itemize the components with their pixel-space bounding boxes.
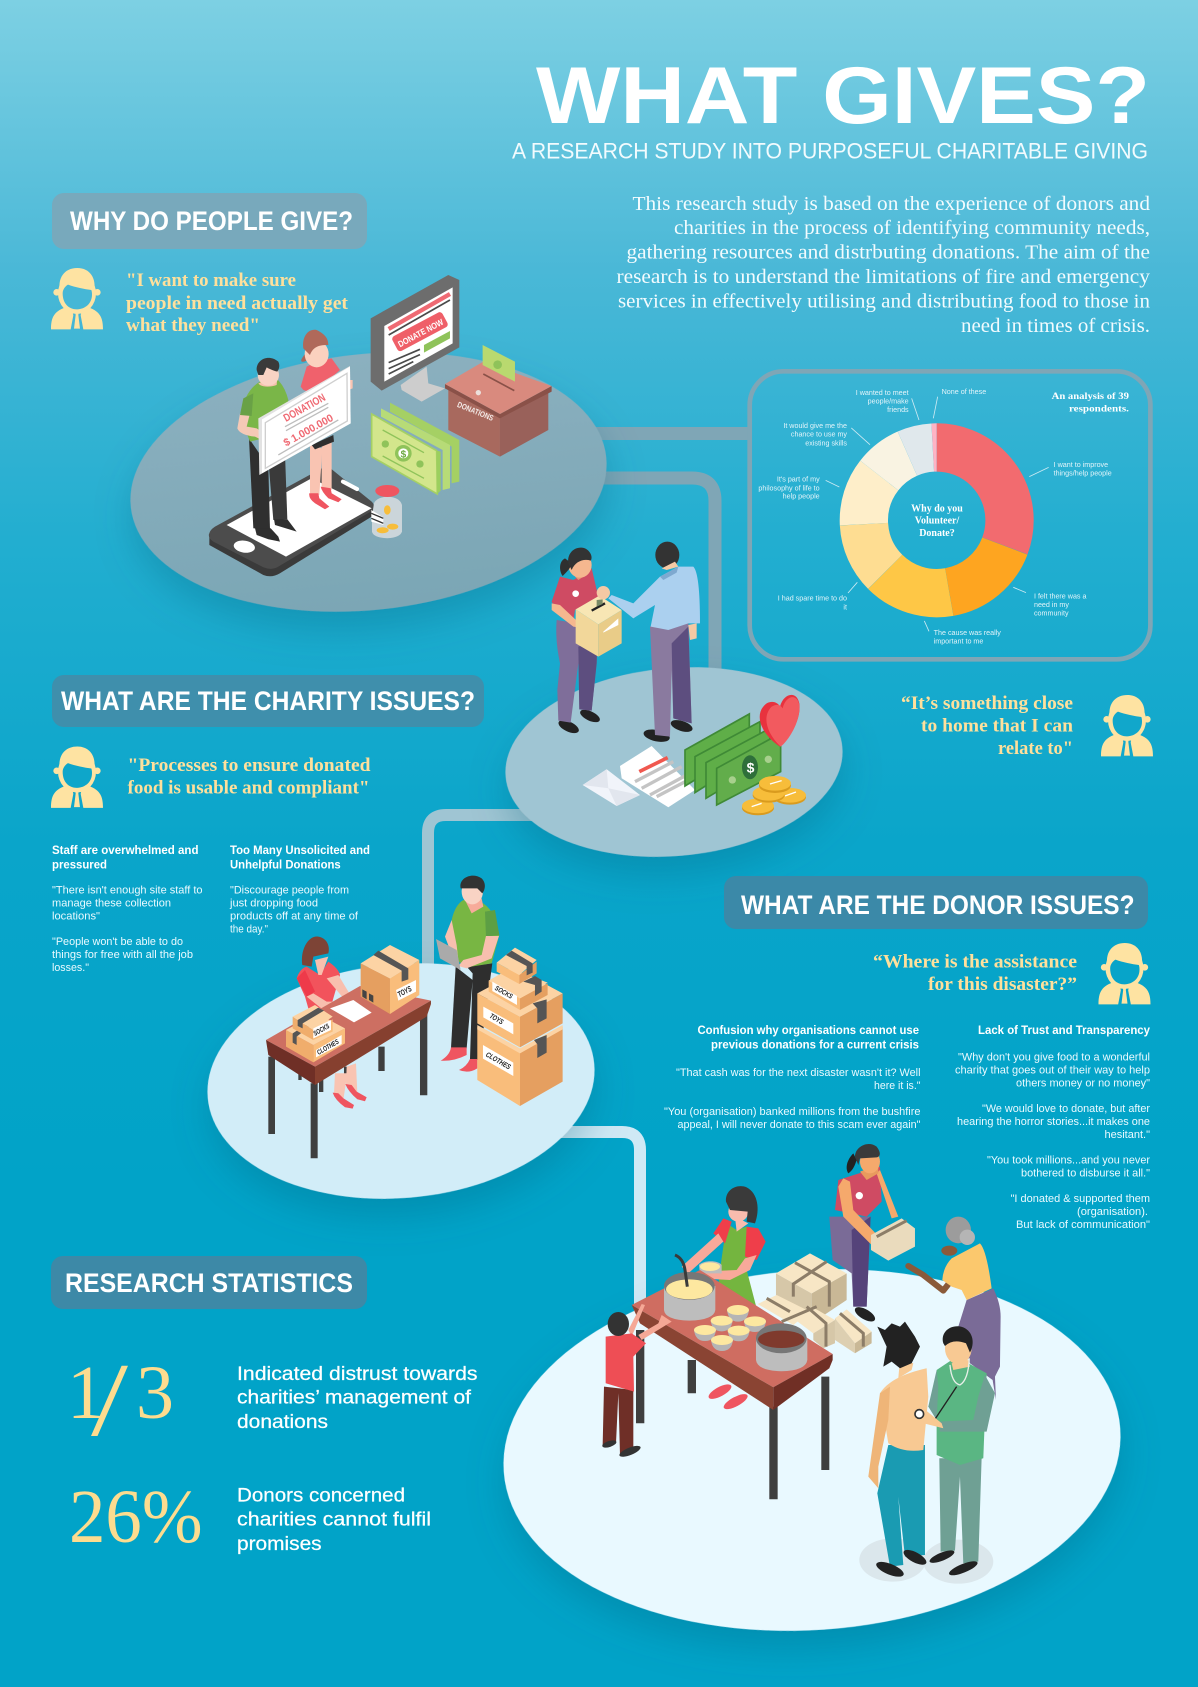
bundle of banknotes bbox=[372, 403, 459, 494]
text block: unsolicited donations: just dropping food bbox=[229, 898, 318, 910]
intro paragraph: services in effectively utilising and distributing food to those in bbox=[618, 292, 1150, 312]
icon: person 3 bbox=[51, 746, 103, 808]
text block: confusion: "That cash was for the next disaster wasn't it? Well bbox=[676, 1067, 920, 1079]
chart labels and leader lines: The cause was really bbox=[934, 629, 1001, 637]
platform: donor scene bbox=[491, 1249, 1133, 1651]
statistic: 26 percent bbox=[69, 1475, 431, 1559]
text block: confusion: Confusion why organisations cannot use bbox=[698, 1023, 919, 1037]
parcels: socks and clothes: CLOTHES bbox=[316, 1039, 341, 1057]
table legs bbox=[268, 1013, 427, 1158]
chart labels and leader lines: community bbox=[1034, 609, 1069, 617]
cardboard boxes bbox=[758, 1253, 872, 1353]
connector: giving to second scene bbox=[590, 478, 715, 690]
statistic: one third: / bbox=[91, 1341, 129, 1458]
text block: unsolicited donations: products off at any time of bbox=[230, 910, 359, 922]
quote: why give: people in need actually get bbox=[126, 294, 349, 314]
heading: research statistics bbox=[51, 1256, 367, 1309]
text block: staff overwhelmed: pressured bbox=[52, 858, 107, 872]
text block: lack of trust: hearing the horror stories...it makes one bbox=[957, 1116, 1150, 1128]
standing man with tablet bbox=[436, 876, 499, 1072]
chart labels and leader lines: respondents. bbox=[1069, 405, 1129, 415]
quote: why give: "I want to make sure bbox=[126, 271, 296, 291]
heart front face bbox=[766, 697, 799, 747]
donation box: DONATIONS bbox=[456, 400, 495, 423]
statistic: 26 percent: promises bbox=[237, 1533, 322, 1555]
soup bowls bbox=[694, 1305, 766, 1351]
large pot bbox=[664, 1255, 715, 1321]
small pot bbox=[756, 1323, 807, 1371]
quote: why give bbox=[126, 271, 349, 336]
gold coins bbox=[742, 776, 806, 815]
statistic: one third: donations bbox=[237, 1411, 328, 1433]
text block: lack of trust: hesitant." bbox=[1104, 1129, 1150, 1141]
patient bbox=[868, 1322, 943, 1580]
doctor bbox=[923, 1326, 995, 1578]
quote: close to home: “It’s something close bbox=[901, 694, 1073, 714]
text block: lack of trust bbox=[955, 1023, 1150, 1231]
text block: confusion: appeal, I will never donate to this scam ever again" bbox=[678, 1119, 921, 1131]
heading: why do people give bbox=[52, 193, 367, 249]
heading: donor issues bbox=[724, 876, 1148, 929]
intro paragraph bbox=[616, 194, 1150, 337]
cheque: DONATION bbox=[282, 392, 328, 425]
intro paragraph: research is to understand the limitations of fire and emergency bbox=[616, 267, 1150, 288]
quote: close to home: relate to" bbox=[998, 739, 1073, 759]
woman in red top bbox=[301, 330, 353, 509]
statistic: one third: 3 bbox=[136, 1351, 174, 1435]
text block: staff overwhelmed: things for free with all the job bbox=[52, 949, 193, 961]
statistic: one third: charities’ management of bbox=[237, 1386, 472, 1408]
text block: confusion: here it is." bbox=[874, 1080, 921, 1092]
icon: person 1 bbox=[51, 268, 103, 329]
chart labels and leader lines: I felt there was a bbox=[1034, 592, 1086, 600]
heading: why do people give: WHY DO PEOPLE GIVE? bbox=[70, 206, 353, 236]
text block: lack of trust: "I donated & supported them bbox=[1010, 1193, 1150, 1205]
man in blue shirt bbox=[597, 542, 700, 744]
text block: unsolicited donations: Unhelpful Donations bbox=[230, 858, 341, 872]
icon: person 2 bbox=[1101, 695, 1153, 756]
box stack: SOCKS bbox=[493, 985, 514, 1001]
shoes under table bbox=[707, 1382, 750, 1412]
illustration: handing over donation bbox=[552, 542, 806, 815]
text block: confusion: previous donations for a current crisis bbox=[711, 1038, 919, 1052]
text block: lack of trust: "We would love to donate, but after bbox=[982, 1103, 1150, 1115]
text block: unsolicited donations bbox=[229, 843, 370, 936]
green banknotes: $ bbox=[747, 760, 755, 776]
parcel: toys: TOYS bbox=[396, 984, 414, 999]
platform: giving scene bbox=[117, 330, 620, 634]
intro paragraph: need in times of crisis. bbox=[961, 316, 1150, 337]
seated woman bbox=[297, 937, 367, 1109]
chart labels and leader lines: philosophy of life to bbox=[758, 484, 820, 492]
statistic: one third: 1 bbox=[67, 1351, 105, 1435]
chart labels and leader lines: people/make bbox=[868, 398, 909, 406]
paper sheet bbox=[330, 1000, 372, 1022]
text block: unsolicited donations: the day." bbox=[230, 924, 268, 936]
text block: lack of trust: (organisation). bbox=[1077, 1206, 1148, 1218]
heading: charity issues: WHAT ARE THE CHARITY ISSUES? bbox=[61, 686, 475, 716]
text block: staff overwhelmed: Staff are overwhelmed and bbox=[52, 843, 198, 857]
heading: donor issues: WHAT ARE THE DONOR ISSUES? bbox=[741, 890, 1134, 920]
quote: processes bbox=[128, 756, 371, 798]
bundle of banknotes: $ bbox=[401, 449, 407, 460]
chart labels and leader lines: It's part of my bbox=[777, 476, 820, 484]
chart labels and leader lines: need in my bbox=[1034, 601, 1069, 609]
chart labels and leader lines: I want to improve bbox=[1054, 461, 1108, 469]
statistic: one third: Indicated distrust towards bbox=[237, 1363, 478, 1385]
text block: staff overwhelmed: manage these collection bbox=[52, 898, 171, 910]
text block: lack of trust: bothered to disburse it all." bbox=[1021, 1168, 1150, 1180]
chart labels and leader lines: existing skills bbox=[805, 439, 847, 447]
desktop monitor: DONATE NOW bbox=[396, 316, 446, 349]
box stack bbox=[477, 948, 563, 1106]
donation box bbox=[445, 345, 552, 457]
chart labels and leader lines: I had spare time to do bbox=[778, 595, 847, 603]
cheque bbox=[258, 366, 351, 475]
chart labels and leader lines: It would give me the bbox=[783, 422, 847, 430]
icon: person 4 bbox=[1098, 943, 1150, 1004]
chart labels and leader lines: Why do you bbox=[911, 503, 963, 514]
chart labels and leader lines: help people bbox=[783, 493, 820, 501]
intro paragraph: gathering resources and distrbuting donations. The aim of the bbox=[626, 242, 1150, 264]
cheque: $ 1.000.000 bbox=[282, 412, 336, 449]
foot shadows bbox=[859, 1538, 993, 1584]
quote: processes: "Processes to ensure donated bbox=[128, 756, 371, 776]
statistic: 26 percent: charities cannot fulfil bbox=[237, 1508, 431, 1530]
text block: staff overwhelmed: locations" bbox=[52, 910, 100, 922]
collection box bbox=[576, 596, 622, 657]
chart labels and leader lines: An analysis of 39 bbox=[1052, 392, 1129, 402]
text block: lack of trust: Lack of Trust and Transparency bbox=[978, 1023, 1150, 1037]
text block: staff overwhelmed: "There isn't enough site staff to bbox=[52, 884, 202, 896]
quote: where is the assistance: for this disaster?” bbox=[928, 975, 1077, 995]
quote: where is the assistance: “Where is the assistance bbox=[873, 952, 1077, 972]
text block: staff overwhelmed: "People won't be able to do bbox=[52, 936, 183, 948]
text block: unsolicited donations: Too Many Unsolicited and bbox=[230, 843, 370, 857]
desktop monitor bbox=[371, 275, 459, 402]
statistic: 26 percent: 26% bbox=[69, 1475, 202, 1559]
chart labels and leader lines: I wanted to meet bbox=[856, 389, 909, 397]
parcel: toys bbox=[361, 945, 419, 1014]
intro paragraph: charities in the process of identifying community needs, bbox=[674, 218, 1150, 239]
red heart bbox=[760, 695, 800, 747]
heading: charity issues bbox=[52, 675, 484, 727]
illustration: sorting boxes bbox=[266, 876, 563, 1158]
phone platform bbox=[209, 467, 375, 576]
text block: lack of trust: "You took millions...and you never bbox=[987, 1154, 1150, 1166]
connector: second scene to charity scene bbox=[428, 815, 540, 985]
illustration: online donation scene bbox=[209, 275, 552, 576]
illustration: food relief scene bbox=[601, 1144, 1001, 1584]
connector: giving to pie panel bbox=[590, 427, 748, 440]
box stack: TOYS bbox=[488, 1011, 505, 1026]
elderly woman bbox=[908, 1217, 1001, 1400]
woman holding box bbox=[552, 548, 602, 736]
man in green shirt bbox=[237, 358, 297, 542]
quote: processes: food is usable and compliant" bbox=[128, 778, 370, 798]
platform: charity scene bbox=[198, 948, 604, 1214]
quote: close to home bbox=[901, 694, 1074, 759]
quote: why give: what they need" bbox=[126, 316, 260, 336]
chart labels and leader lines: important to me bbox=[934, 638, 983, 646]
text block: unsolicited donations: "Discourage people from bbox=[230, 884, 349, 896]
parcels: socks and clothes bbox=[286, 1005, 345, 1062]
heading: research statistics: RESEARCH STATISTICS bbox=[65, 1268, 353, 1298]
text block: lack of trust: "Why don't you give food to a wonderful bbox=[958, 1052, 1150, 1064]
subtitle: A RESEARCH STUDY INTO PURPOSEFUL CHARITABLE GIVING bbox=[512, 138, 1148, 164]
chart labels and leader lines bbox=[758, 388, 1129, 646]
parcels: socks and clothes: SOCKS bbox=[312, 1023, 331, 1038]
statistic: 26 percent: Donors concerned bbox=[237, 1484, 405, 1506]
title: WHAT GIVES? bbox=[536, 51, 1150, 141]
platform: handover scene bbox=[497, 654, 851, 870]
text block: confusion: "You (organisation) banked millions from the bushfire bbox=[664, 1106, 920, 1118]
chart labels and leader lines: things/help people bbox=[1054, 470, 1112, 478]
quote: where is the assistance bbox=[873, 952, 1077, 995]
box stack: CLOTHES bbox=[484, 1050, 513, 1071]
text block: confusion bbox=[664, 1023, 921, 1131]
envelope and letter bbox=[583, 746, 695, 807]
table top bbox=[266, 986, 431, 1085]
green banknotes bbox=[685, 714, 781, 805]
coin jar bbox=[371, 485, 402, 538]
donut chart bbox=[834, 417, 1040, 623]
intro paragraph: This research study is based on the experience of donors and bbox=[632, 194, 1150, 215]
child bbox=[601, 1304, 672, 1459]
chart labels and leader lines: chance to use my bbox=[791, 431, 847, 439]
table legs bbox=[636, 1330, 829, 1499]
pie panel frame bbox=[750, 371, 1150, 659]
text block: lack of trust: others money or no money" bbox=[1016, 1078, 1150, 1090]
chart labels and leader lines: Donate? bbox=[919, 528, 955, 539]
quote: close to home: to home that I can bbox=[921, 716, 1074, 736]
chart labels and leader lines: Volunteer/ bbox=[915, 516, 959, 527]
text block: lack of trust: charity that goes out of their way to help bbox=[955, 1064, 1150, 1076]
woman carrying parcel bbox=[829, 1144, 915, 1324]
chart labels and leader lines: it bbox=[843, 603, 847, 611]
apron woman bbox=[682, 1186, 766, 1308]
text block: lack of trust: But lack of communication" bbox=[1016, 1219, 1150, 1231]
table top bbox=[632, 1270, 833, 1410]
text block: staff overwhelmed: losses." bbox=[52, 962, 89, 974]
chart labels and leader lines: friends bbox=[887, 406, 909, 414]
text block: staff overwhelmed bbox=[52, 843, 202, 974]
chart labels and leader lines: None of these bbox=[942, 388, 986, 396]
connector: charity scene to donor scene bbox=[560, 1132, 640, 1340]
statistic: one third bbox=[67, 1341, 478, 1458]
